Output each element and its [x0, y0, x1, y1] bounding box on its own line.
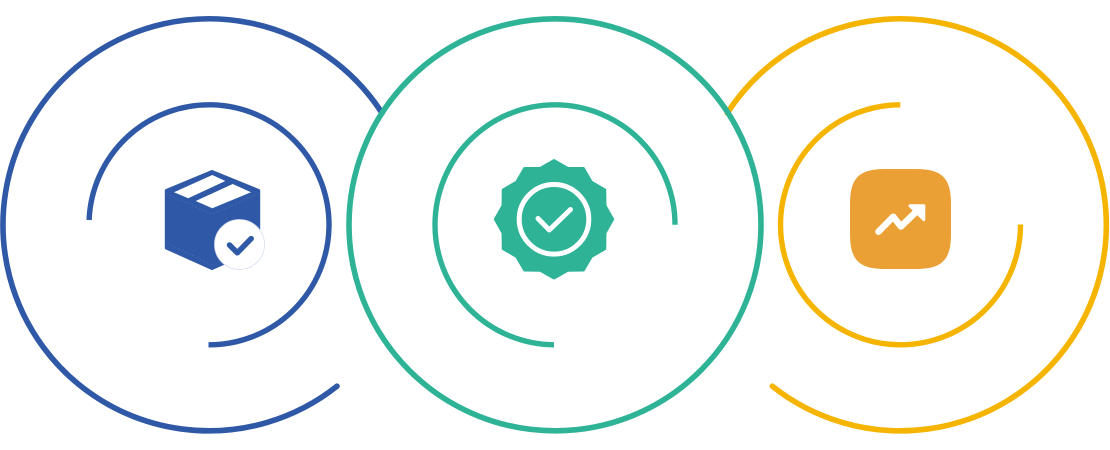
blue inner arc	[89, 105, 329, 345]
seal shape	[494, 160, 614, 279]
panel: blue ring with box icon	[3, 19, 382, 431]
seal ring	[519, 184, 589, 254]
green outer circle	[349, 19, 761, 431]
arrow head	[910, 206, 924, 220]
yellow inner arc	[781, 105, 1021, 345]
icon: seal with check	[494, 160, 614, 279]
orange rounded tile	[850, 169, 951, 269]
check mark	[230, 239, 251, 253]
yellow outer arc	[727, 19, 1106, 431]
check badge	[214, 220, 264, 270]
box lid panels	[174, 175, 251, 208]
blue outer arc	[3, 19, 382, 431]
green inner arc	[435, 105, 675, 345]
trend line	[878, 210, 918, 232]
box body	[166, 172, 259, 268]
icon: growth arrow tile	[850, 169, 951, 269]
panel: yellow ring with growth icon	[727, 19, 1106, 431]
seal check mark	[538, 210, 570, 230]
icon: box with check badge	[166, 172, 264, 270]
panel: green ring with seal icon	[349, 19, 761, 431]
